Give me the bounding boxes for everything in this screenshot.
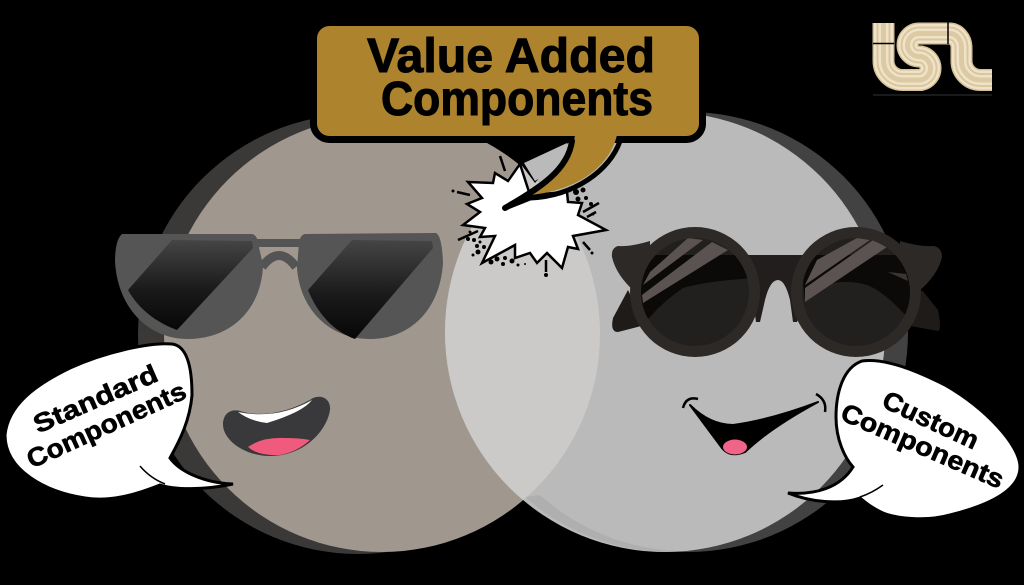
burst lines	[457, 156, 599, 272]
right dimple	[816, 394, 825, 412]
temple arms	[612, 290, 940, 332]
nose arch	[262, 256, 296, 267]
sunglasses left	[115, 233, 443, 339]
top bar of bridge	[255, 239, 302, 247]
venn diagram	[138, 112, 908, 554]
bubble shape	[788, 361, 1020, 519]
logo cuts	[873, 22, 948, 44]
gold tail	[530, 135, 617, 195]
right lens	[308, 240, 433, 339]
logo underline	[873, 94, 992, 96]
left dimple	[683, 398, 698, 408]
burst dots	[452, 188, 594, 277]
text: custom components: Custom	[878, 384, 984, 455]
burst star	[463, 164, 606, 268]
mouth right	[683, 394, 825, 454]
tongue	[723, 440, 747, 454]
left lens	[640, 238, 760, 346]
left rim	[630, 227, 760, 357]
right lens	[800, 238, 915, 346]
text: custom components: Components	[836, 397, 1009, 495]
tail right outline	[505, 141, 620, 208]
sunglasses right	[612, 227, 942, 357]
speech bubble left	[5, 344, 233, 499]
tail crease	[860, 485, 883, 497]
tongue	[248, 438, 310, 455]
gap inside wedge	[524, 143, 567, 181]
left lens	[128, 240, 253, 330]
tail crease	[140, 466, 165, 484]
mouth shape	[223, 397, 330, 456]
bridge	[745, 255, 805, 322]
tail left outline	[505, 141, 572, 208]
wings	[612, 241, 942, 292]
circle: standard components	[164, 116, 600, 552]
smile	[690, 402, 818, 454]
logo: ISL	[873, 22, 992, 95]
burst with tail	[452, 156, 606, 277]
right circle shadow	[468, 112, 908, 552]
heading	[367, 30, 655, 126]
overlap: value added	[445, 168, 600, 500]
circle: custom components	[445, 112, 885, 552]
black tail wedge	[490, 138, 572, 183]
left circle shadow	[138, 114, 578, 554]
text: standard components: Components	[22, 375, 191, 474]
speech bubble top: value added components	[314, 22, 702, 208]
bubble body	[314, 22, 702, 140]
speech bubble right	[788, 361, 1020, 519]
mouth left	[223, 397, 330, 456]
right lens frame	[297, 233, 443, 339]
right rim	[791, 227, 921, 357]
text: standard components: Standard	[28, 358, 162, 439]
left lens frame	[115, 234, 263, 339]
crescent on custom circle	[525, 495, 685, 552]
heading: Components	[381, 73, 653, 126]
bubble shape	[5, 344, 233, 499]
heading: Value Added	[367, 30, 655, 83]
teeth	[238, 400, 312, 423]
logo stripes	[884, 23, 992, 80]
